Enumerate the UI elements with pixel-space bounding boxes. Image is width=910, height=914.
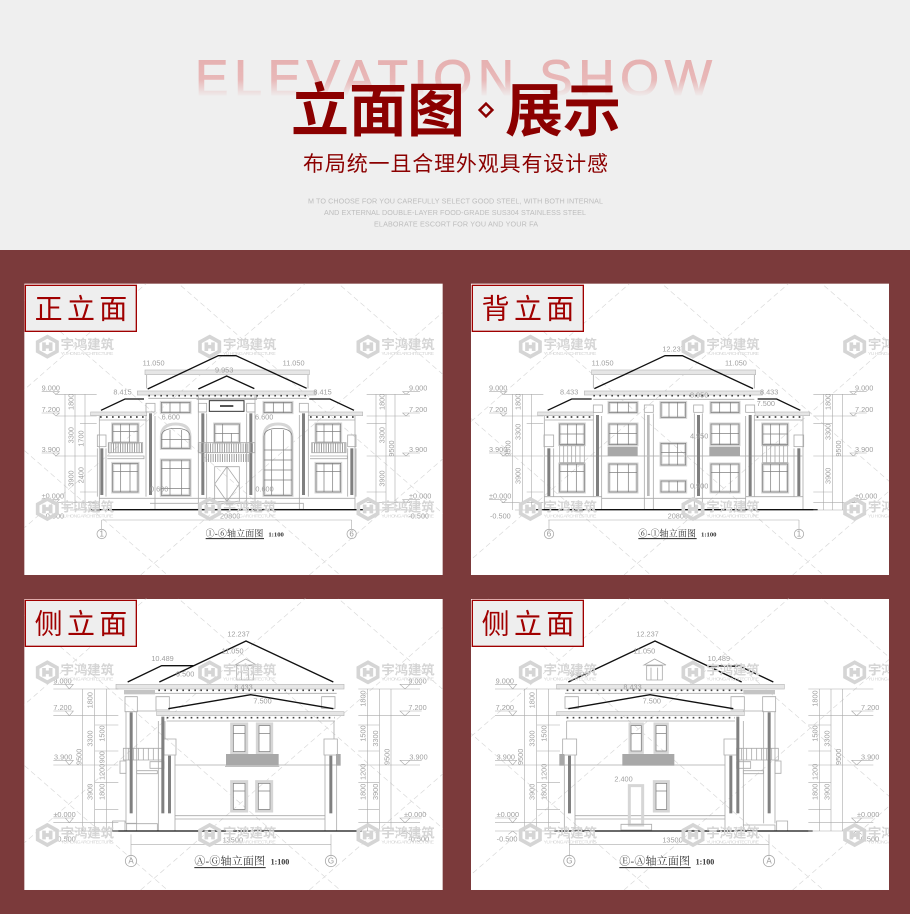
main title right: 展示 [505, 79, 621, 144]
side elevation A-G drawing: 7.200 [408, 703, 427, 712]
side elevation A-G drawing: 1200 [98, 764, 107, 780]
front elevation drawing: 1700 [76, 430, 85, 447]
side elevation G-A drawing [495, 629, 879, 868]
side elevation A-G drawing: 3300 [371, 730, 380, 747]
watermarks: YU HONG ARCHITECTURE [706, 351, 760, 357]
side elevation G-A drawing: 9.000 [496, 676, 514, 685]
side elevation A-G drawing: 9500 [74, 749, 83, 765]
side elevation A-G drawing: 12.237 [227, 629, 250, 638]
label: front elevation [25, 285, 136, 331]
rear elevation drawing: 3900 [513, 468, 522, 484]
front elevation drawing: 1 [99, 530, 104, 539]
front elevation drawing: ±0.000 [42, 492, 64, 501]
side elevation G-A drawing: 1800 [527, 692, 536, 708]
side elevation A-G drawing: 9.500 [176, 670, 194, 679]
front elevation drawing: 11.050 [283, 358, 305, 367]
header background [0, 0, 910, 250]
watermarks [521, 336, 910, 519]
watermarks: 宇鸿建筑 [706, 662, 760, 678]
rear elevation drawing: 1800 [824, 394, 833, 410]
watermarks: YU HONG ARCHITECTURE [706, 677, 760, 683]
watermarks: 宇鸿建筑 [706, 336, 760, 352]
watermarks: YU HONG ARCHITECTURE [544, 513, 597, 519]
main title left: 立面图 [291, 79, 465, 144]
front elevation drawing: 6.600 [162, 412, 180, 421]
front elevation drawing: 3300 [378, 427, 387, 443]
side elevation A-G drawing: 900 [98, 751, 107, 763]
front elevation drawing: 3.900 [42, 445, 60, 454]
side elevation G-A drawing: 9500 [834, 749, 843, 765]
rear elevation drawing: 8.950 [690, 390, 708, 399]
side elevation G-A drawing: 3900 [527, 784, 536, 800]
front elevation drawing: 3.900 [409, 445, 427, 454]
rear elevation drawing: 4.950 [690, 431, 708, 440]
side elevation G-A drawing: 3300 [527, 730, 536, 747]
rear elevation drawing: 8.433 [560, 388, 578, 397]
side elevation G-A drawing: 8.433 [623, 682, 642, 691]
watermarks: 宇鸿建筑 [223, 824, 277, 840]
watermarks: YU HONG ARCHITECTURE [223, 677, 276, 683]
side elevation G-A drawing: 2.400 [614, 775, 633, 784]
side elevation G-A drawing: A [766, 857, 772, 866]
rear elevation drawing: 7.200 [489, 405, 507, 414]
front elevation drawing: 3900 [378, 470, 387, 487]
watermarks: 宇鸿建筑 [381, 662, 435, 678]
front elevation drawing: ±0.000 [409, 492, 431, 501]
side elevation A-G drawing: Ⓐ-Ⓖ轴立面图 [194, 853, 265, 867]
side elevation G-A drawing: 1500 [539, 725, 548, 742]
rear elevation drawing: ⑥-①轴立面图 [638, 528, 696, 539]
side elevation A-G drawing: 7.500 [253, 696, 272, 705]
side elevation A-G drawing: 1:100 [271, 857, 289, 866]
side elevation A-G drawing: 1500 [358, 725, 367, 742]
side elevation A-G drawing: 8.433 [234, 682, 253, 691]
watermarks [521, 662, 910, 845]
side elevation A-G drawing: 11.050 [222, 646, 244, 655]
side elevation A-G drawing: ±0.000 [404, 810, 426, 819]
side elevation A-G drawing [53, 629, 429, 868]
watermarks: YU HONG ARCHITECTURE [223, 351, 276, 357]
watermarks: YU HONG ARCHITECTURE [381, 839, 435, 845]
rear elevation drawing: ±0.000 [489, 492, 511, 501]
side elevation G-A drawing: -0.500 [497, 835, 517, 844]
rear elevation drawing: 6 [547, 530, 552, 539]
watermarks: YU HONG ARCHITECTURE [706, 839, 760, 845]
side elevation A-G drawing: 1800 [358, 690, 367, 707]
watermarks: YU HONG ARCHITECTURE [544, 677, 597, 683]
side elevation A-G drawing: 3.900 [409, 753, 428, 762]
rear elevation drawing [489, 344, 877, 539]
front elevation drawing: ①-⑥轴立面图 [206, 528, 263, 539]
watermarks: 宇鸿建筑 [544, 498, 598, 514]
side elevation G-A drawing: 3.900 [861, 753, 879, 762]
rear elevation drawing: 8.433 [760, 388, 778, 397]
watermarks: 宇鸿建筑 [706, 824, 760, 840]
side elevation G-A drawing: G [566, 857, 572, 866]
front elevation drawing: 0.600 [255, 484, 274, 493]
label: side elevation left: 侧立面 [35, 608, 132, 639]
label: rear elevation [472, 285, 583, 331]
side elevation A-G drawing: 1800 [98, 784, 107, 800]
rear elevation drawing: 11.050 [725, 358, 747, 367]
side elevation A-G drawing: 7.200 [53, 703, 72, 712]
rear elevation drawing: 9.000 [855, 384, 873, 393]
side elevation G-A drawing: ±0.000 [497, 810, 519, 819]
english caption [308, 196, 603, 228]
side elevation G-A drawing: 7.200 [861, 703, 879, 712]
side elevation A-G drawing: 1800 [86, 692, 95, 708]
front elevation drawing: -0.500 [43, 512, 64, 521]
front elevation drawing: 8.415 [113, 388, 132, 397]
lower section background [0, 250, 910, 914]
subtitle: 布局统一且合理外观具有设计感 [303, 153, 608, 176]
side elevation G-A drawing: 1800 [811, 690, 820, 707]
rear elevation drawing: 7.500 [757, 399, 775, 408]
front elevation drawing: 1800 [66, 394, 75, 410]
english caption: ELABORATE ESCORT FOR YOU AND YOUR FA [374, 220, 538, 228]
side elevation G-A drawing: 7.500 [643, 696, 661, 705]
watermarks: 宇鸿建筑 [706, 498, 760, 514]
side elevation A-G drawing: A [128, 857, 134, 866]
side elevation A-G drawing: 3.900 [54, 753, 72, 762]
watermarks: YU HONG ARCHITECTURE [223, 513, 276, 519]
side elevation A-G drawing: 3900 [86, 784, 95, 800]
side elevation G-A drawing: -0.500 [858, 835, 879, 844]
label: rear elevation: 背立面 [482, 293, 579, 324]
watermarks: 宇鸿建筑 [223, 498, 277, 514]
side elevation G-A drawing: 11.050 [633, 646, 655, 655]
front elevation drawing: 7.200 [42, 405, 60, 414]
watermarks: YU HONG ARCHITECTURE [223, 839, 276, 845]
watermarks: YU HONG ARCHITECTURE [706, 513, 760, 519]
rear elevation drawing: 3300 [824, 424, 833, 440]
rear elevation drawing: ±0.000 [855, 492, 877, 501]
side elevation A-G drawing: 1500 [98, 725, 107, 742]
side elevation G-A drawing: 1200 [539, 764, 548, 780]
front elevation drawing: 6.600 [255, 412, 273, 421]
side elevation A-G drawing: -0.500 [55, 835, 76, 844]
side elevation A-G drawing: 9.000 [53, 676, 72, 685]
side elevation G-A drawing: 9.500 [570, 670, 588, 679]
rear elevation drawing: 7.200 [855, 405, 873, 414]
front elevation drawing: 9.953 [215, 366, 233, 375]
panel: front elevation [0, 280, 450, 575]
rear elevation drawing: 3.900 [855, 445, 873, 454]
watermarks: YU HONG ARCHITECTURE [381, 677, 435, 683]
rear elevation drawing: 1:100 [701, 531, 717, 538]
watermarks: 宇鸿建筑 [61, 336, 115, 352]
side elevation A-G drawing: 10.489 [151, 654, 174, 663]
label: side elevation right: 侧立面 [482, 608, 579, 639]
watermarks: 宇鸿建筑 [223, 336, 277, 352]
label: side elevation left [25, 600, 136, 646]
side elevation G-A drawing: 1800 [539, 784, 548, 800]
side elevation A-G drawing: 1800 [358, 784, 367, 800]
side elevation A-G drawing: G [328, 857, 334, 866]
watermarks: YU HONG ARCHITECTURE [61, 351, 114, 357]
front elevation drawing: 8.415 [313, 388, 332, 397]
watermarks: 宇鸿建筑 [61, 662, 115, 678]
front elevation drawing: 6 [349, 530, 354, 539]
watermarks: YU HONG ARCHITECTURE [381, 351, 435, 357]
side elevation A-G drawing: 9.000 [408, 676, 427, 685]
side elevation G-A drawing: 3.900 [497, 753, 515, 762]
rear elevation drawing: 1 [797, 530, 802, 539]
side elevation G-A drawing: 10.489 [708, 654, 730, 663]
watermarks: 宇鸿建筑 [381, 824, 435, 840]
rear elevation drawing: 1800 [513, 394, 522, 410]
rear elevation drawing: 9500 [503, 440, 512, 457]
watermarks: YU HONG ARCHITECTURE [61, 839, 114, 845]
rear elevation drawing: 0.900 [690, 481, 708, 490]
side elevation G-A drawing: 1200 [811, 764, 820, 780]
side elevation G-A drawing: ±0.000 [857, 810, 879, 819]
front elevation drawing: 7.200 [409, 405, 427, 414]
watermarks: 宇鸿建筑 [223, 662, 277, 678]
side elevation G-A drawing: 12.237 [636, 629, 659, 638]
front elevation drawing: 9.000 [42, 384, 60, 393]
front elevation drawing [42, 356, 431, 539]
rear elevation drawing: 3300 [513, 424, 522, 440]
side elevation A-G drawing: ±0.000 [53, 810, 76, 819]
english caption: AND EXTERNAL DOUBLE-LAYER FOOD-GRADE SUS304 STAINLESS STEEL [324, 208, 586, 217]
front elevation drawing: 9500 [387, 440, 396, 457]
watermarks: YU HONG ARCHITECTURE [544, 839, 597, 845]
watermarks: 宇鸿建筑 [381, 498, 435, 514]
side elevation A-G drawing: 9500 [382, 749, 391, 765]
front elevation drawing: 2400 [76, 467, 85, 483]
rear elevation drawing: 9500 [834, 440, 843, 457]
label: side elevation right [472, 600, 583, 646]
rear elevation drawing: 9.000 [489, 384, 507, 393]
side elevation G-A drawing: Ⓔ-Ⓐ轴立面图 [619, 853, 690, 867]
side elevation G-A drawing: 1800 [811, 784, 820, 800]
rear elevation drawing: 11.050 [592, 358, 614, 367]
rear elevation drawing: 20800 [668, 512, 688, 521]
front elevation drawing: 1800 [378, 394, 387, 410]
front elevation drawing: 3300 [66, 427, 75, 443]
watermarks: YU HONG ARCHITECTURE [381, 513, 435, 519]
watermarks: YU HONG ARCHITECTURE [61, 677, 114, 683]
watermarks [38, 662, 435, 845]
side elevation A-G drawing: -0.500 [408, 835, 429, 844]
panel: rear elevation [471, 284, 889, 575]
watermarks: YU HONG ARCHITECTURE [61, 513, 114, 519]
watermarks: 宇鸿建筑 [61, 824, 115, 840]
side elevation G-A drawing: 13500 [662, 835, 683, 844]
front elevation drawing: 20800 [220, 512, 240, 521]
side elevation G-A drawing: 1500 [811, 725, 820, 742]
watermarks: 宇鸿建筑 [381, 336, 435, 352]
front elevation drawing: 3900 [66, 470, 75, 487]
front elevation drawing: -0.500 [408, 512, 429, 521]
watermarks: 宇鸿建筑 [61, 498, 115, 514]
label: front elevation: 正立面 [35, 293, 132, 324]
side elevation A-G drawing: 13500 [223, 835, 243, 844]
rear elevation drawing: 3900 [824, 468, 833, 484]
front elevation drawing: 11.050 [143, 358, 165, 367]
front elevation drawing: 9.000 [409, 384, 427, 393]
rear elevation drawing: 3.900 [489, 445, 507, 454]
side elevation G-A drawing: 9500 [516, 749, 525, 765]
watermarks: YU HONG ARCHITECTURE [544, 351, 597, 357]
panel: side elevation right [471, 598, 889, 890]
panel: side elevation left [0, 595, 450, 890]
watermarks: 宇鸿建筑 [544, 824, 598, 840]
rear elevation drawing: -0.500 [490, 512, 511, 521]
side elevation A-G drawing: 3300 [86, 730, 95, 747]
side elevation G-A drawing: 7.200 [496, 703, 514, 712]
english caption: M TO CHOOSE FOR YOU CAREFULLY SELECT GOOD STEEL, WITH BOTH INTERNAL [308, 196, 603, 206]
rear elevation drawing: 12.237 [662, 344, 685, 353]
side elevation A-G drawing: 1200 [358, 764, 367, 780]
watermarks [38, 336, 435, 519]
side elevation G-A drawing: 1:100 [696, 857, 714, 866]
front elevation drawing: 0.600 [150, 484, 168, 493]
front elevation drawing: 1:100 [268, 531, 285, 538]
watermarks: 宇鸿建筑 [544, 662, 598, 678]
side elevation A-G drawing: 3900 [371, 784, 380, 800]
side elevation G-A drawing: 3900 [823, 784, 832, 800]
icon: diamond separator [480, 104, 492, 116]
watermarks: 宇鸿建筑 [544, 336, 598, 352]
side elevation G-A drawing: 3300 [823, 730, 832, 747]
english ghost heading: ELEVATION SHOW [195, 50, 713, 106]
